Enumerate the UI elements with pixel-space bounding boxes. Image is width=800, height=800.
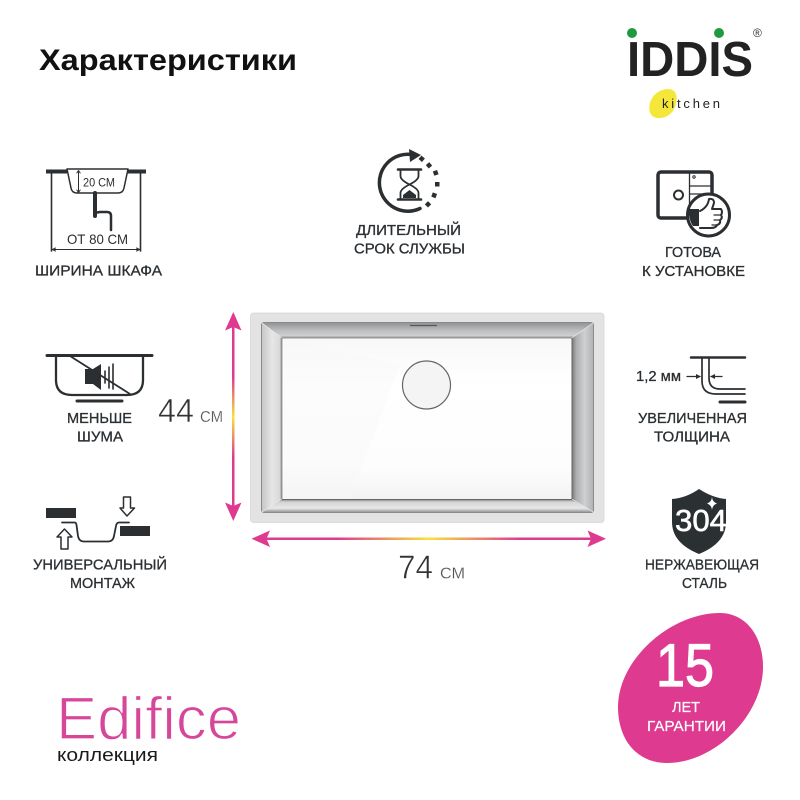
- height value: СМ: [200, 409, 223, 426]
- icon: sink in cabinet: ОТ 80 СМ: [67, 231, 128, 247]
- height value: [158, 392, 223, 429]
- drain cover: [402, 361, 450, 409]
- icon: sink in cabinet: [46, 169, 146, 251]
- kitchen wordmark: kitchen: [662, 96, 720, 111]
- collection name: Edifice: [56, 685, 241, 752]
- feature: ready to install: [642, 172, 745, 280]
- icon: wall thickness: 1,2 мм: [636, 368, 681, 385]
- yellow blob: [649, 89, 677, 118]
- width value: [398, 548, 465, 586]
- title: Характеристики: [39, 44, 297, 77]
- icon: mounting diagram: [46, 497, 150, 549]
- label: К УСТАНОВКЕ: [642, 263, 745, 280]
- label: ШУМА: [77, 428, 123, 446]
- feature: increased thickness: [636, 358, 747, 446]
- label: УНИВЕРСАЛЬНЫЙ: [33, 556, 167, 574]
- height value: 44: [158, 392, 194, 429]
- width value: СМ: [440, 566, 465, 582]
- feature: long service life: [354, 149, 465, 258]
- label: [642, 244, 745, 280]
- label: МОНТАЖ: [70, 575, 135, 592]
- logo: IDDIS kitchen: [627, 26, 762, 118]
- logo green dots: [627, 28, 724, 38]
- label: [354, 221, 465, 258]
- label: ТОЛЩИНА: [654, 428, 730, 446]
- warranty badge: ГАРАНТИИ: [647, 718, 726, 735]
- label: СРОК СЛУЖБЫ: [354, 240, 465, 258]
- warranty badge: [618, 613, 763, 763]
- label: МЕНЬШЕ: [67, 410, 132, 427]
- feature: universal mounting: [33, 497, 167, 592]
- icon: shield 304: 304: [675, 503, 727, 538]
- registered mark: ®: [753, 26, 762, 40]
- collection name: коллекция: [57, 745, 158, 765]
- warranty badge: ЛЕТ: [672, 699, 700, 716]
- label: НЕРЖАВЕЮЩАЯ: [645, 556, 759, 574]
- logo wordmark: IDDIS: [627, 33, 753, 87]
- label: [645, 556, 759, 592]
- width value: 74: [398, 548, 433, 586]
- feature: stainless steel: [645, 489, 759, 592]
- warranty badge: 15: [656, 632, 714, 699]
- label: СТАЛЬ: [682, 575, 727, 592]
- label: УВЕЛИЧЕННАЯ: [638, 410, 747, 427]
- label: ШИРИНА ШКАФА: [35, 262, 162, 280]
- label: [33, 556, 167, 592]
- feature: cabinet width: [35, 169, 162, 280]
- label: [67, 410, 132, 446]
- icon: muted sink: [47, 356, 152, 401]
- label: ГОТОВА: [665, 244, 721, 261]
- icon: sink in cabinet: 20 СМ: [83, 176, 115, 190]
- feature: less noise: [47, 356, 152, 446]
- label: [638, 410, 747, 446]
- arrow: width dimension: [252, 530, 606, 547]
- arrow: height dimension: [225, 312, 242, 521]
- icon: hourglass with circular arrow: [379, 149, 440, 211]
- sink photo: [250, 313, 604, 522]
- label: ДЛИТЕЛЬНЫЙ: [356, 221, 461, 239]
- icon: box with thumb up: [658, 172, 730, 236]
